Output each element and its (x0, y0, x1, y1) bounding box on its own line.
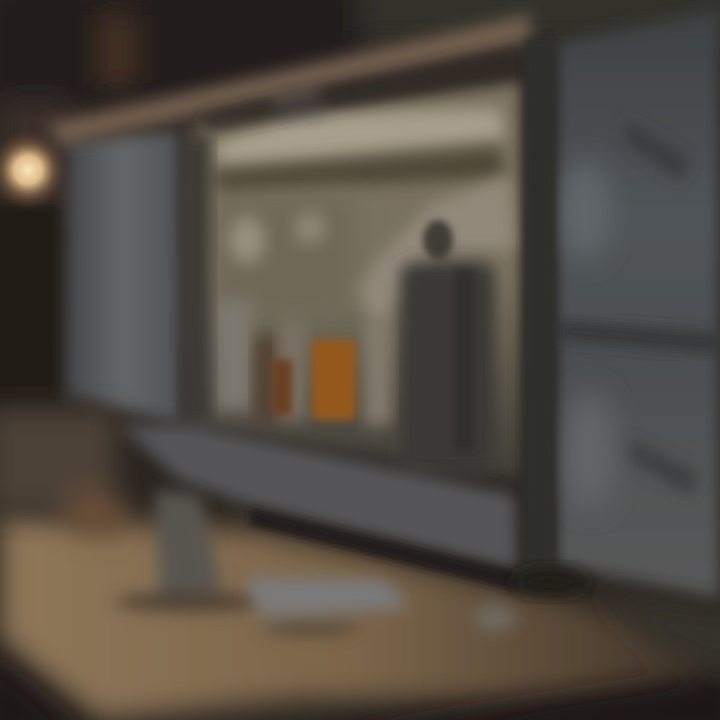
left dark wall (0, 205, 62, 405)
angled beam (48, 14, 530, 146)
grey ledge below window (120, 425, 520, 592)
foreground dark edges (0, 590, 720, 720)
grey object on table (115, 490, 265, 612)
upper dark ceiling (0, 0, 720, 210)
window ceiling canopy (215, 108, 505, 165)
pale wall segments (350, 175, 515, 330)
lamp glow (0, 130, 68, 210)
dark post (522, 36, 556, 590)
right grey panel (556, 10, 720, 600)
panel seam (556, 322, 720, 352)
paper on table (245, 578, 515, 635)
orange bottles (312, 340, 356, 420)
table surface (0, 515, 720, 720)
left counter clutter (0, 410, 127, 537)
lower shelf items (215, 300, 253, 410)
figure in window (423, 220, 453, 260)
centre window (192, 80, 522, 480)
left grey panel (66, 130, 182, 425)
window frame left (184, 135, 210, 425)
